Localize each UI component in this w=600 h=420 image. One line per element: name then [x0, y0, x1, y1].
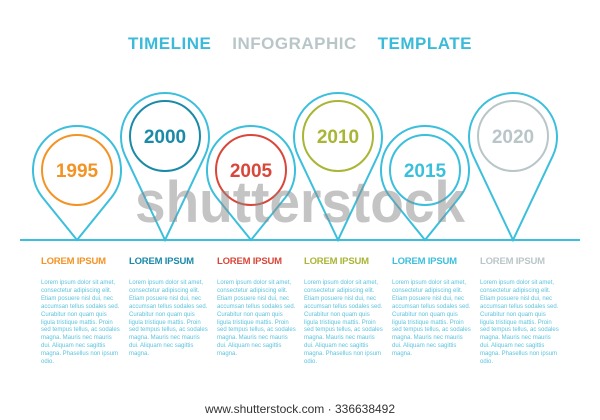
column 4: LOREM IPSUM [304, 256, 369, 267]
column 5: LOREM IPSUM [392, 256, 457, 267]
pin 2010 [294, 93, 382, 240]
column 1: Lorem ipsum dolor sit amet, consectetur adipiscing elit. Etiam posuere nisl dui, nec accumsan tellus sodales sed. Curabitur non quam quis ligula tristique mattis. Proin sed tempus tellus, ac sodales magna. Mauris nec mauris dui. Aliquam nec sagittis magna. Phasellus non ipsum odio. [41, 280, 120, 365]
baseline [20, 239, 580, 241]
column 4: Lorem ipsum dolor sit amet, consectetur adipiscing elit. Etiam posuere nisl dui, nec accumsan tellus sodales sed. Curabitur non quam quis ligula tristique mattis. Proin sed tempus tellus, ac sodales magna. Mauris nec mauris dui. Aliquam nec sagittis magna. Phasellus non ipsum odio. [304, 280, 383, 365]
pin 2015 [381, 126, 469, 240]
title: TIMELINE INFOGRAPHIC TEMPLATE [128, 34, 472, 53]
pin 2015: 2015 [404, 161, 447, 182]
watermark: shutterstock [135, 170, 466, 235]
footer: www.shutterstock.com · 336638492 [205, 402, 395, 416]
pin 2010: 2010 [317, 127, 359, 148]
column 2: Lorem ipsum dolor sit amet, consectetur adipiscing elit. Etiam posuere nisl dui, nec accumsan tellus sodales sed. Curabitur non quam quis ligula tristique mattis. Proin sed tempus tellus, ac sodales magna. Mauris nec mauris dui. Aliquam nec sagittis magna. [129, 280, 208, 357]
column 6: LOREM IPSUM [480, 256, 545, 267]
column 3: Lorem ipsum dolor sit amet, consectetur adipiscing elit. Etiam posuere nisl dui, nec accumsan tellus sodales sed. Curabitur non quam quis ligula tristique mattis. Proin sed tempus tellus, ac sodales magna. Mauris nec mauris dui. Aliquam nec sagittis magna. [217, 280, 296, 357]
pin 1995: 1995 [56, 161, 99, 182]
pin 2020 [469, 93, 557, 240]
pin 2000: 2000 [144, 127, 186, 148]
column 6: Lorem ipsum dolor sit amet, consectetur adipiscing elit. Etiam posuere nisl dui, nec accumsan tellus sodales sed. Curabitur non quam quis ligula tristique mattis. Proin sed tempus tellus, ac sodales magna. Mauris nec mauris dui. Aliquam nec sagittis magna. Phasellus non ipsum odio. [480, 280, 559, 365]
pin 2005: 2005 [230, 161, 273, 182]
column 5: Lorem ipsum dolor sit amet, consectetur adipiscing elit. Etiam posuere nisl dui, nec accumsan tellus sodales sed. Curabitur non quam quis ligula tristique mattis. Proin sed tempus tellus, ac sodales magna. Mauris nec mauris dui. Aliquam nec sagittis magna. [392, 280, 471, 357]
pin 2005 [207, 126, 295, 240]
column 1: LOREM IPSUM [41, 256, 106, 267]
footer [0, 398, 600, 420]
pin 2000 [121, 93, 209, 240]
column 3: LOREM IPSUM [217, 256, 282, 267]
pin 2020: 2020 [492, 127, 534, 148]
column 2: LOREM IPSUM [129, 256, 194, 267]
pin 1995 [33, 126, 121, 240]
